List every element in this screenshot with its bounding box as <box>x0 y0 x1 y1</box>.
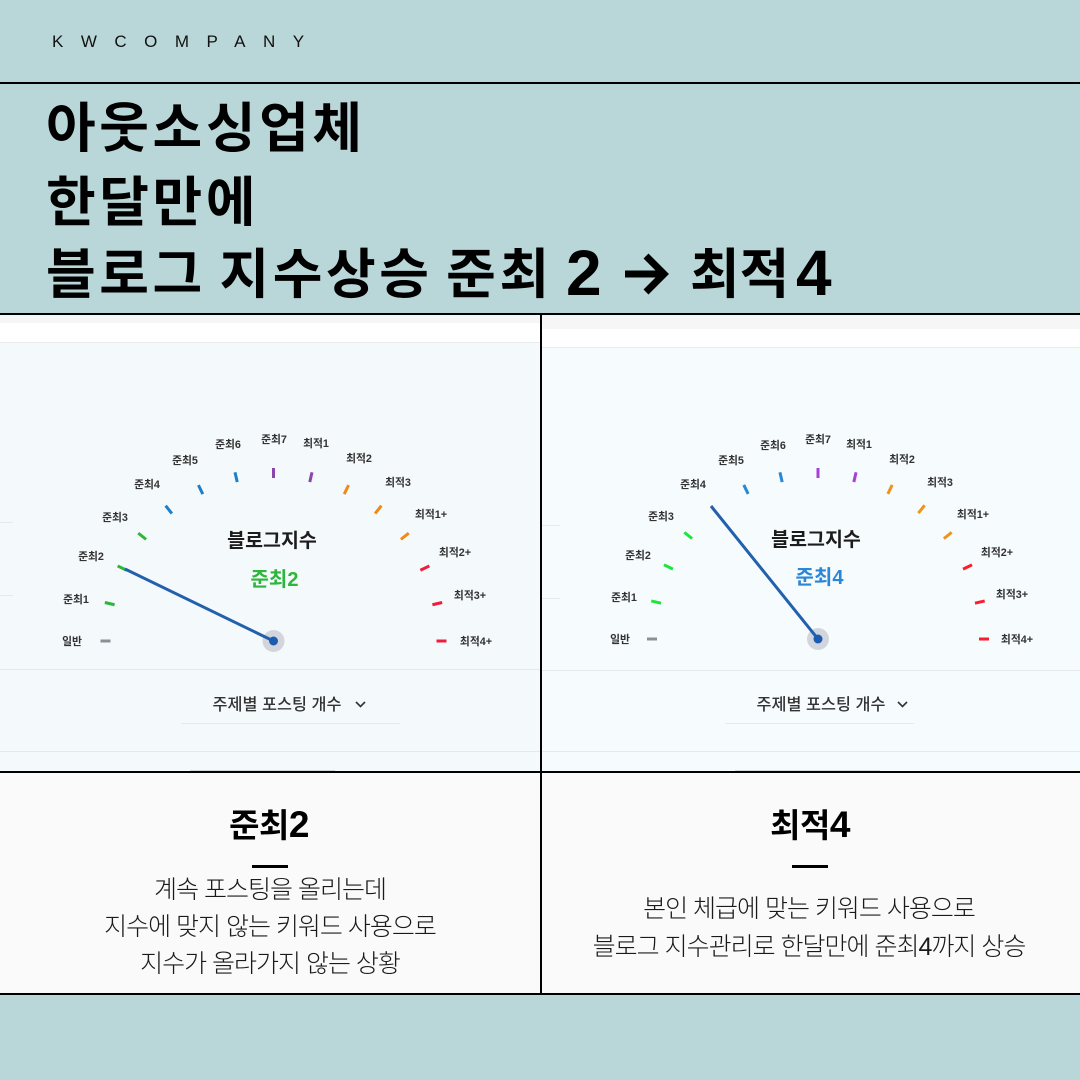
gauge labels <box>62 432 492 648</box>
gauge labels: 준최6 <box>760 438 786 452</box>
gauge labels <box>610 432 1033 646</box>
gauge labels: 준최4 <box>680 477 706 491</box>
heading: 준최2: 준최2 <box>229 804 309 845</box>
gauge labels: 최적1+ <box>957 507 989 521</box>
brand name: KWCOMPANY <box>52 32 322 51</box>
gauge labels: 최적4+ <box>460 634 492 648</box>
gauge labels: 최적3 <box>927 475 953 489</box>
arrow <box>625 254 669 294</box>
gauge labels: 준최3 <box>102 510 128 524</box>
gauge labels: 최적4+ <box>1001 632 1033 646</box>
description text: 계속 포스팅을 올리는데 지수에 맞지 않는 키워드 사용으로 지수가 올라가지 않는 상황 <box>104 876 436 978</box>
gauge labels: 최적2 <box>346 451 372 465</box>
gauge value: 준최4 <box>796 566 844 589</box>
gauge labels: 준최4 <box>134 477 160 491</box>
panel: left gauge screenshot <box>0 315 540 771</box>
gauge title: 블로그지수 <box>771 529 861 551</box>
gauge labels: 최적3+ <box>454 588 486 602</box>
panel: right gauge screenshot <box>542 315 1080 771</box>
gauge labels: 준최5 <box>718 453 744 467</box>
gauge labels: 최적2 <box>889 452 915 466</box>
gauge labels: 최적2+ <box>981 545 1013 559</box>
gauge labels: 최적2+ <box>439 545 471 559</box>
gauge labels: 준최2 <box>78 549 104 563</box>
title: 4 <box>796 237 832 309</box>
heading: 최적4: 최적4 <box>770 804 850 845</box>
gauge labels: 일반 <box>610 632 630 646</box>
panel: right description <box>541 773 1080 994</box>
needle <box>125 569 284 652</box>
gauge labels: 최적3 <box>385 475 411 489</box>
gauge ticks <box>100 468 446 641</box>
gauge ticks <box>647 468 989 639</box>
title: 한달만에 <box>46 173 259 233</box>
description text: 본인 체급에 맞는 키워드 사용으로 블로그 지수관리로 한달만에 준최4까지 상승 <box>593 895 1025 961</box>
gauge labels: 준최7 <box>261 432 287 446</box>
title: 2 <box>566 237 602 309</box>
gauge labels: 최적1 <box>846 437 872 451</box>
title: 아웃소싱업체 <box>46 99 366 159</box>
gauge labels: 최적3+ <box>996 587 1028 601</box>
gauge labels: 준최5 <box>172 453 198 467</box>
gauge labels: 최적1 <box>303 436 329 450</box>
title: 블로그 지수상승 준최 <box>46 245 553 305</box>
title: 최적 <box>690 245 789 305</box>
needle <box>711 506 829 650</box>
gauge labels: 준최7 <box>805 432 831 446</box>
gauge labels: 일반 <box>62 634 82 648</box>
gauge value: 준최2 <box>251 568 298 591</box>
dropdown: 주제별 포스팅 개수 <box>213 696 341 714</box>
gauge labels: 준최3 <box>648 509 674 523</box>
gauge labels: 준최1 <box>611 590 637 604</box>
gauge labels: 준최6 <box>215 437 241 451</box>
title <box>46 99 832 309</box>
gauge labels: 최적1+ <box>415 507 447 521</box>
gauge labels: 준최1 <box>63 592 89 606</box>
dropdown: 주제별 포스팅 개수 <box>757 696 885 714</box>
panel: left description <box>0 773 541 994</box>
gauge title: 블로그지수 <box>227 530 317 552</box>
gauge labels: 준최2 <box>625 548 651 562</box>
